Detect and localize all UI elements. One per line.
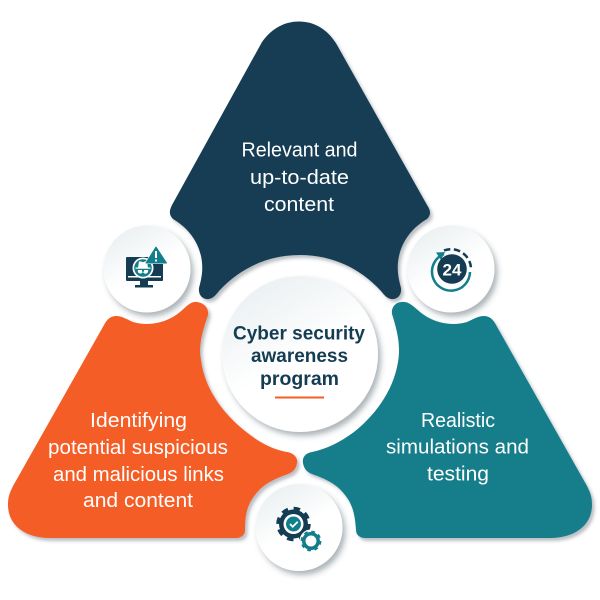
icon badge: gears — [256, 484, 342, 571]
title: program — [260, 369, 339, 390]
icon: 24 clock: 24 — [443, 260, 462, 280]
text: identifying suspicious links: and malicious links — [53, 464, 224, 486]
title — [233, 324, 365, 390]
text: realistic simulations — [386, 410, 529, 486]
text: identifying suspicious links: and content — [83, 490, 193, 512]
text: identifying suspicious links: potential suspicious — [48, 437, 228, 459]
icon badge: monitor with alert — [104, 226, 190, 312]
panel: identifying suspicious links — [8, 302, 297, 538]
heading: relevant content: content — [264, 194, 334, 216]
text: identifying suspicious links — [48, 410, 228, 512]
panel: relevant content — [170, 22, 430, 299]
title: Cyber security — [233, 324, 365, 344]
icon badge: 24 hour clock — [408, 226, 494, 312]
heading: relevant content: Relevant and — [242, 140, 358, 162]
heading: relevant content: up-to-date — [250, 167, 349, 189]
title: awareness — [251, 346, 348, 367]
heading: relevant content — [242, 140, 358, 216]
text: realistic simulations: Realistic — [421, 410, 495, 432]
text: realistic simulations: simulations and — [386, 436, 529, 458]
icon: gears — [278, 508, 322, 552]
icon: monitor — [126, 245, 168, 288]
panel: realistic simulations — [303, 302, 592, 538]
text: identifying suspicious links: Identifying — [90, 410, 187, 432]
title underline — [275, 396, 324, 398]
center circle — [222, 276, 378, 432]
text: realistic simulations: testing — [427, 464, 489, 486]
